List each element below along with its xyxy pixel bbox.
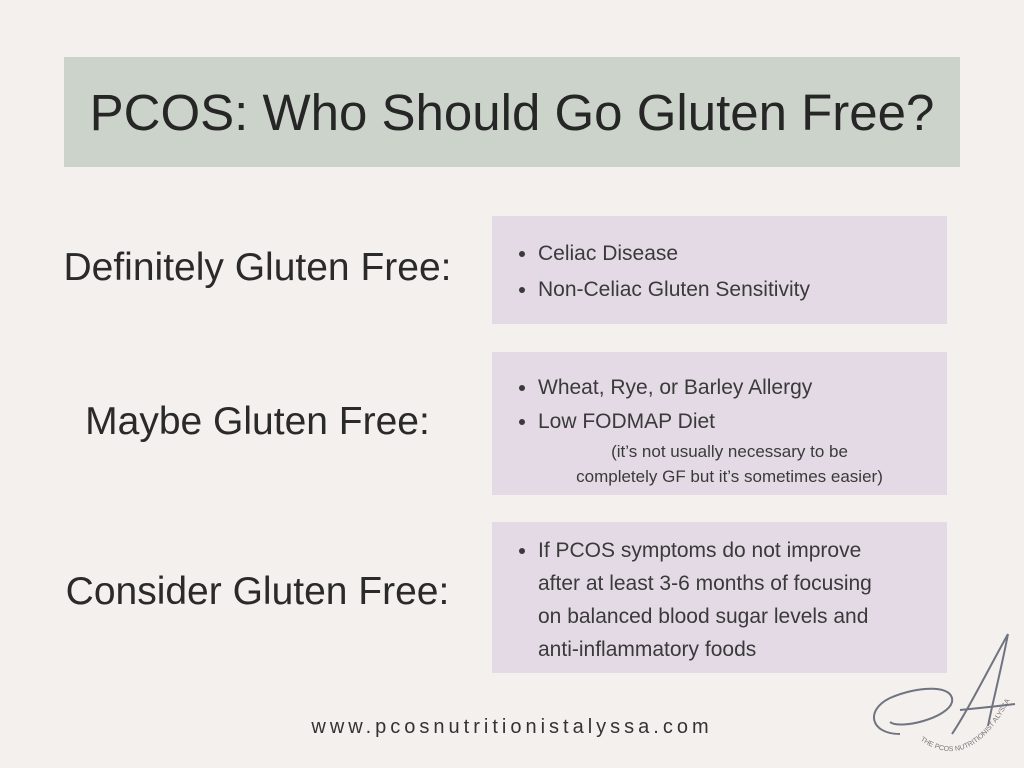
- panel: maybe: (it’s not usually necessary to be: [611, 442, 848, 461]
- panel: maybe: Wheat, Rye, or Barley Allergy: [538, 376, 812, 399]
- panel: maybe: Low FODMAP Diet: [538, 410, 715, 433]
- title: PCOS: Who Should Go Gluten Free?: [90, 84, 934, 140]
- panel: maybe: [492, 352, 947, 495]
- panel: definitely: [492, 216, 947, 324]
- label: consider: Consider Gluten Free:: [66, 570, 449, 613]
- panel: maybe: completely GF but it’s sometimes easier): [576, 467, 883, 486]
- panel: consider: If PCOS symptoms do not improve after at least 3-6 months of focusing on balanced blood sugar levels and anti-inflammatory foods: [538, 539, 872, 661]
- website url: www.pcosnutritionistalyssa.com: [311, 716, 713, 738]
- panel: definitely: Non-Celiac Gluten Sensitivity: [538, 278, 810, 301]
- panel: definitely: Celiac Disease: [538, 242, 678, 265]
- logo: [873, 634, 1016, 752]
- label: definitely: Definitely Gluten Free:: [63, 246, 452, 289]
- panel: consider: [492, 522, 947, 673]
- title: [64, 57, 960, 167]
- label: maybe: Maybe Gluten Free:: [85, 400, 430, 443]
- logo: THE PCOS NUTRITIONIST ALYSSA: [922, 700, 1010, 752]
